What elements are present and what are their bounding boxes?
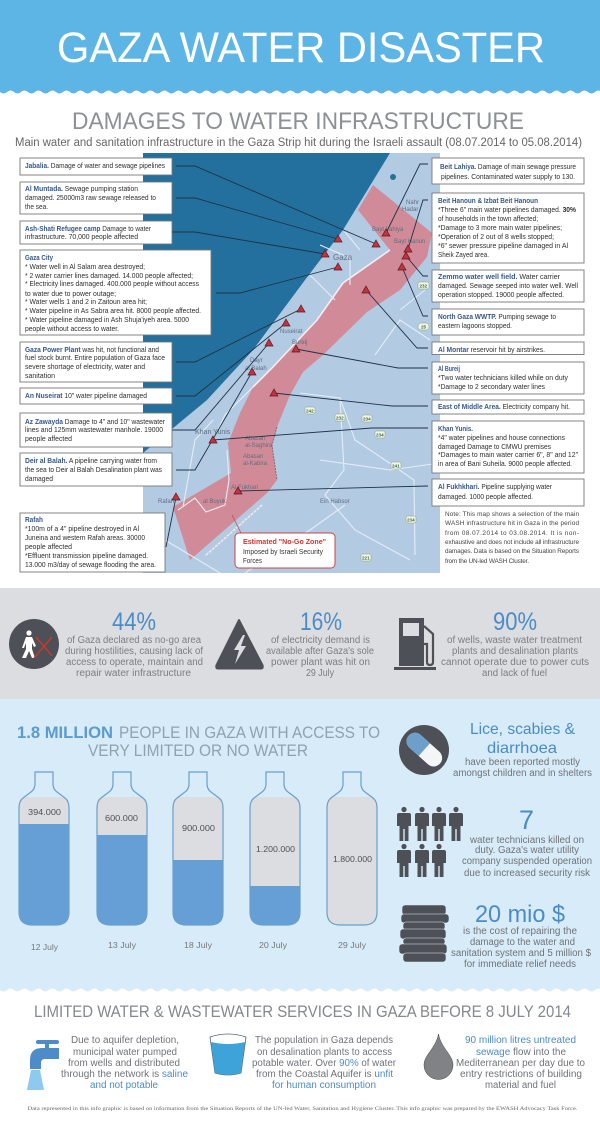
callout: Gaza City: * Electricity lines damaged. 400.000 people without access	[25, 279, 199, 288]
stat: 90%: 90%	[493, 608, 537, 636]
callout: East of Middle Area: East of Middle Area. Electricity company hit.	[438, 402, 570, 411]
road shields: 242	[306, 408, 314, 413]
map note	[445, 511, 579, 565]
callout: Al Bureij: *Damage to 2 secondary water lines	[438, 382, 545, 391]
map place labels: Hadar	[402, 207, 418, 213]
callout: Beit Lahiya	[432, 158, 584, 184]
stat: lice, scabies and diarrhoea: diarrhoea	[487, 740, 557, 757]
text: sewage: material and fuel	[485, 1080, 556, 1091]
map of Gaza Strip	[143, 153, 440, 573]
callout: Beit Hanoun: *6" sewer pressure pipeline damaged in Al	[438, 241, 568, 250]
callout: Az Zawayda: Az Zawayda Damage to 4" and 10" wastewater	[25, 417, 165, 426]
heading: 1.8 million: PEOPLE IN GAZA WITH ACCESS TO	[119, 724, 380, 742]
callout: Gaza City: people without access to water.	[25, 324, 119, 333]
map note: Note: This map shows a selection of the main	[445, 511, 579, 518]
road shields: 232	[336, 415, 344, 420]
stat: lice, scabies and diarrhoea: Lice, scabies &	[470, 721, 575, 738]
text: sewage	[456, 1035, 585, 1091]
text: desalination: from the Coastal Aquifer is unfit	[256, 1069, 393, 1080]
label: 29 July: 29 July	[338, 940, 367, 950]
road shields: 234	[376, 432, 384, 437]
callout: Rafah: 13.000 m3/day of sewage flooding the area.	[25, 560, 156, 569]
callout: Beit Lahiya: pipelines. Contaminated water supply to 130.	[441, 172, 575, 181]
icon: capsule	[399, 725, 449, 775]
callout: Gaza City	[20, 250, 211, 335]
map place labels: Ein Habsor	[320, 499, 350, 505]
callout: Al Montar	[432, 342, 584, 354]
callout: North Gaza WWTP: North Gaza WWTP. Pumping sewage to	[438, 312, 556, 321]
callout: Rafah: Juneina and western Rafah areas. 30000	[25, 533, 145, 542]
stat: 7 technicians: 7	[519, 805, 534, 835]
callout: Al Bureij: *Two water technicians killed while on duty	[438, 373, 568, 382]
callout: Gaza City: * Water pipeline damaged in Ash Shuja'iyeh area. 5000	[25, 315, 189, 324]
heading: 1.8 million: VERY LIMITED OR NO WATER	[88, 742, 308, 760]
stat: 90%	[441, 608, 589, 679]
callout: Beit Hanoun: Sheik Zayed area.	[438, 250, 489, 259]
label: 12 July: 12 July	[31, 942, 59, 952]
icon: seven technicians	[397, 807, 463, 877]
text: aquifer depletion	[61, 1035, 188, 1091]
stat: lice, scabies and diarrhoea: amongst children and in shelters	[453, 768, 592, 779]
legend: no-go zone: Estimated "No-Go Zone"	[243, 537, 326, 546]
callout: Al Muntada	[20, 182, 172, 214]
text: aquifer depletion: municipal water pumped	[73, 1047, 177, 1058]
panel: gray key statistics band	[0, 588, 600, 699]
panel: light blue population section	[0, 699, 600, 993]
subtitle: Main water and sanitation infrastructure in the Gaza Strip hit during the Israeli assault (08.07.2014 to 05.08.2014)	[15, 137, 582, 149]
stat: 44%: repair water infrastructure	[76, 668, 191, 679]
callout: Al Muntada: the sea.	[25, 202, 48, 211]
heading: 1.8 million: 1.8 MILLION	[17, 724, 113, 742]
text: aquifer depletion: Due to aquifer depletion,	[71, 1035, 179, 1046]
map place labels: Al Fukhari	[231, 485, 258, 491]
stat: 20 mio dollars: for immediate relief needs	[464, 959, 576, 970]
callout: Rafah: Rafah	[25, 515, 43, 524]
callout: Al Muntada: Al Muntada. Sewage pumping station	[25, 184, 138, 193]
callout: Beit Lahiya: Beit Lahiya. Damage of main sewage pressure	[440, 162, 576, 171]
map note: from the UN-led WASH Cluster.	[445, 558, 529, 565]
road shields	[305, 282, 429, 561]
chart: bottle 13 July	[97, 772, 147, 925]
callout: An Nuseirat	[20, 388, 172, 404]
chart: bottle 18 July	[173, 772, 223, 925]
callout: Ash-Shati	[20, 221, 172, 244]
callout: Gaza City: * 2 water carrier lines damaged. 14.000 people affected;	[25, 271, 193, 280]
map note: exhaustive and does not include all infrastructure	[445, 539, 579, 546]
stat: 16%	[266, 608, 374, 679]
callout: Khan Yunis: in area of Bani Suheila. 9000 people affected.	[438, 459, 572, 468]
stat: 44%: of Gaza declared as no-go area	[67, 635, 201, 646]
map place labels: al Balah	[245, 366, 267, 372]
icon: stack of coins	[399, 905, 449, 962]
icon: fuel pump	[394, 618, 436, 670]
map place labels: Gaza	[333, 253, 353, 262]
label: 20 July: 20 July	[259, 940, 288, 950]
callout: Deir al Balah: the sea to Deir al Balah Desalination plant was	[25, 465, 162, 474]
map hit markers	[172, 229, 412, 500]
chart: bottle 18 July: 900.000	[182, 824, 216, 833]
callout: Rafah	[20, 513, 165, 572]
heading: 1.8 million	[17, 724, 380, 760]
callout: Beit Hanoun: *Damage to 3 more main water pipelines;	[438, 223, 562, 232]
reservoir	[390, 174, 396, 180]
callout: Jabalia	[20, 158, 172, 175]
callout: Khan Yunis: damaged Damage to CMWU premises	[438, 442, 551, 451]
map note: damages. Data is based on the Situation Reports	[445, 548, 579, 555]
text: desalination: on desalination plants to access	[257, 1047, 392, 1058]
callout: Beit Hanoun: of households in the town affected;	[438, 214, 538, 223]
chart: bottle 20 July: 1.200.000	[256, 845, 296, 854]
stat: 90%: cannot operate due to power cuts	[441, 657, 589, 668]
callout: Rafah: *Effluent transmission pipeline damaged.	[25, 551, 148, 560]
callout: Khan Yunis: *Damages to main water carrier 6", 8" and 12"	[438, 450, 578, 459]
icon: sewage drop	[424, 1034, 453, 1080]
icon: no-go pedestrian	[9, 619, 59, 669]
chart: bottle 29 July	[327, 772, 377, 925]
callout: North Gaza WWTP	[432, 309, 584, 335]
callout: Zemmo: Zemmo water well field. Water carrier	[438, 272, 561, 281]
callout: Rafah: people affected	[25, 542, 72, 551]
callout: Zemmo: damaged. Sewage seeped into water well. Well	[438, 281, 578, 290]
text: sewage: sewage flow into the	[476, 1047, 566, 1058]
stat: 90%: of wells, waste water treatment	[447, 635, 582, 646]
stat: 7 technicians: duty. Gaza's water utility	[475, 845, 579, 856]
callout: Zemmo	[432, 270, 584, 302]
callout: Khan Yunis: Khan Yunis.	[438, 424, 473, 433]
map place labels: Khan Yunis	[195, 429, 231, 436]
text: desalination	[252, 1035, 397, 1091]
roads	[165, 232, 440, 573]
icon: electricity warning triangle	[216, 620, 263, 669]
text: aquifer depletion: and not potable	[90, 1080, 158, 1091]
stat: 7 technicians: company suspended operation	[462, 856, 592, 867]
map place labels: Nahr	[406, 200, 419, 206]
no-go zone	[173, 185, 432, 560]
stat: 20 mio dollars	[451, 901, 591, 970]
callout: Khan Yunis: *4" water pipelines and house connections	[438, 433, 565, 442]
callout: Gaza City: * Water well in Al Salam area destroyed;	[25, 262, 145, 271]
callout: Beit Hanoun	[432, 193, 584, 263]
road shields: 241	[392, 463, 400, 468]
stat: 16%: of electricity demand is	[271, 635, 370, 646]
leader lines	[166, 164, 428, 547]
callout: Ash-Shati: infrastructure. 70,000 people affected	[25, 232, 138, 241]
callout: Al Bureij: Al Bureij	[438, 364, 460, 373]
callout: Al Fukhkhari	[432, 479, 584, 506]
chart: bottle 13 July: 600.000	[105, 814, 139, 823]
map place labels: Dayr	[250, 358, 263, 364]
stat: 7 technicians: water technicians killed on	[469, 835, 584, 846]
callout: Beit Hanoun: Beit Hanoun & Izbat Beit Hanoun	[438, 196, 538, 205]
text: sewage: 90 million litres untreated	[465, 1035, 576, 1046]
stat: 20 mio dollars: sanitation system and 5 million $	[451, 948, 591, 959]
road shields: 234	[363, 416, 371, 421]
callout: Zemmo: operation stopped. 19000 people affected.	[438, 290, 564, 299]
legend: no-go zone: Imposed by Israeli Security	[243, 547, 323, 556]
callout: Gaza City: Gaza City	[25, 253, 54, 262]
callout: Gaza City: * Water pipeline in As Sabra area hit. 8000 people affected.	[25, 306, 201, 315]
chart: bottle 12 July	[19, 772, 69, 925]
chart: bottle 29 July: 1.800.000	[333, 855, 373, 864]
stat: 7 technicians	[462, 805, 592, 879]
map place labels: Abasan	[243, 454, 263, 460]
callout: Gaza Power Plant: Gaza Power Plant was hit, not functional and	[25, 345, 159, 354]
stat: 44%	[65, 608, 203, 679]
title: GAZA WATER DISASTER	[57, 24, 545, 72]
header banner	[0, 0, 600, 95]
text: aquifer depletion: from wells and distributed	[68, 1058, 180, 1069]
callout: Al Fukhkhari: Al Fukhkhari. Pipeline supplying water	[438, 482, 552, 491]
map place labels: al-Kabira	[243, 461, 268, 467]
map place labels: al Buyuk	[203, 499, 227, 505]
callout: Beit Hanoun: *Operation of 2 out of 8 wells stopped;	[438, 232, 554, 241]
callout: An Nuseirat: An Nuseirat 10" water pipeline damaged	[25, 391, 147, 400]
stat: 16%: 29 July	[306, 668, 334, 679]
stat: 44%: during hostilities, causing lack of	[65, 646, 203, 657]
label: 13 July: 13 July	[108, 940, 137, 950]
callout: Gaza Power Plant	[20, 342, 172, 382]
stat: 16%: 16%	[300, 608, 342, 636]
chart: bottle 20 July	[250, 772, 300, 925]
stat: 20 mio dollars: is the cost of repairing the	[463, 926, 577, 937]
map place labels: Abasan	[245, 436, 265, 442]
text: sewage: entry restrictions of building	[460, 1069, 582, 1080]
callout: Az Zawayda	[20, 413, 172, 447]
text: desalination: for human consumption	[272, 1080, 376, 1091]
stat: 90%: and lack of fuel	[482, 668, 547, 679]
callout: Deir al Balah: damaged	[25, 474, 53, 483]
stat: 90%: plants and desalination plants	[452, 646, 578, 657]
callout: Beit Hanoun: *Three 6" main water pipelines damaged. 30%	[438, 205, 576, 214]
chart: bottle 12 July: 394.000	[28, 808, 62, 817]
text: desalination: potable water. Over 90% of water	[252, 1058, 397, 1069]
map place labels: Nuseirat	[280, 329, 303, 335]
map place labels: Bureij	[292, 340, 307, 346]
road shields: 221	[362, 555, 370, 560]
stat: 20 mio dollars: 20 mio $	[475, 901, 565, 928]
callout: Az Zawayda: people affected	[25, 434, 72, 443]
callout: East of Middle Area	[432, 400, 584, 414]
callout: Al Montar: Al Montar reservoir hit by airstrikes.	[438, 345, 545, 354]
icon: water tap	[27, 1040, 59, 1090]
stat: lice, scabies and diarrhoea: have been reported mostly	[465, 757, 580, 768]
callout: Al Bureij	[432, 362, 584, 394]
footer credit: Data represented in this info graphic is based on information from the Situation Reports of the UN-led Water, Sanitation and Hygiene Cluster. This info graphic was prepared by the EWASH Advocacy Task Force.	[28, 1105, 578, 1112]
callout: Deir al Balah	[20, 453, 172, 486]
stat: 44%: access to operate, maintain and	[66, 657, 203, 668]
map place labels: Bayt Lahiya	[372, 227, 404, 233]
callout: Rafah: *100m of a 4" pipeline destroyed in Al	[25, 524, 139, 533]
legend: no-go zone	[232, 515, 335, 568]
callout: Gaza Power Plant: fuel stock burnt. Entire population of Gaza face	[25, 353, 165, 362]
callout: Khan Yunis	[432, 421, 584, 473]
text: aquifer depletion: through the network is saline	[61, 1069, 188, 1080]
legend: no-go zone: Forces	[243, 556, 262, 565]
callout: Gaza Power Plant: severe shortage of electricity, water and	[25, 362, 145, 371]
text: sewage: Mediterranean per day due to	[456, 1058, 585, 1069]
map note: from 08.07.2014 to 03.08.2014. It is non-	[445, 530, 579, 537]
callout: Jabalia: Jabalia. Damage of water and sewage pipelines	[25, 161, 165, 170]
section heading: damages: DAMAGES TO WATER INFRASTRUCTURE	[72, 108, 524, 135]
callout: Gaza Power Plant: sanitation	[25, 371, 55, 380]
callout: Az Zawayda: lines and 125mm wastewater manhole. 19000	[25, 425, 163, 434]
map place labels	[158, 200, 425, 505]
sea	[143, 153, 390, 453]
callout: Gaza City: to water due to power outage;	[25, 289, 116, 298]
callout: Ash-Shati: Ash-Shati Refugee camp Damage to water	[25, 224, 151, 233]
road shields: 25	[421, 324, 427, 329]
icon: water glass	[210, 1034, 246, 1075]
callout: Al Muntada: damaged. 25000m3 raw sewage released to	[25, 193, 156, 202]
road shields: 232	[420, 283, 428, 288]
callout: Al Fukhkhari: damaged. 1000 people affected.	[438, 492, 533, 501]
stat: 20 mio dollars: damage to the water and	[470, 937, 575, 948]
road shields: 234	[407, 517, 415, 522]
stat: lice, scabies and diarrhoea	[453, 721, 592, 779]
map note: WASH infrastructure hit in Gaza in the period	[445, 520, 579, 527]
map place labels: Rafah	[158, 499, 174, 505]
stat: 7 technicians: due to increased security risk	[464, 868, 591, 879]
stat: 44%: 44%	[112, 608, 156, 636]
callout: Gaza City: * Water wells 1 and 2 in Zaitoun area hit;	[25, 297, 147, 306]
label: 18 July: 18 July	[184, 940, 213, 950]
map place labels: al-Saghira	[245, 443, 273, 449]
stat: 16%: available after Gaza's sole	[266, 646, 374, 657]
text: desalination: The population in Gaza depends	[255, 1035, 393, 1046]
callout: North Gaza WWTP: eastern lagoons stopped.	[438, 321, 512, 330]
map place labels: Bayt Hanun	[394, 239, 425, 245]
stat: 16%: power plant was hit on	[271, 657, 370, 668]
callout: Deir al Balah: Deir al Balah. A pipeline carrying water from	[25, 456, 157, 465]
